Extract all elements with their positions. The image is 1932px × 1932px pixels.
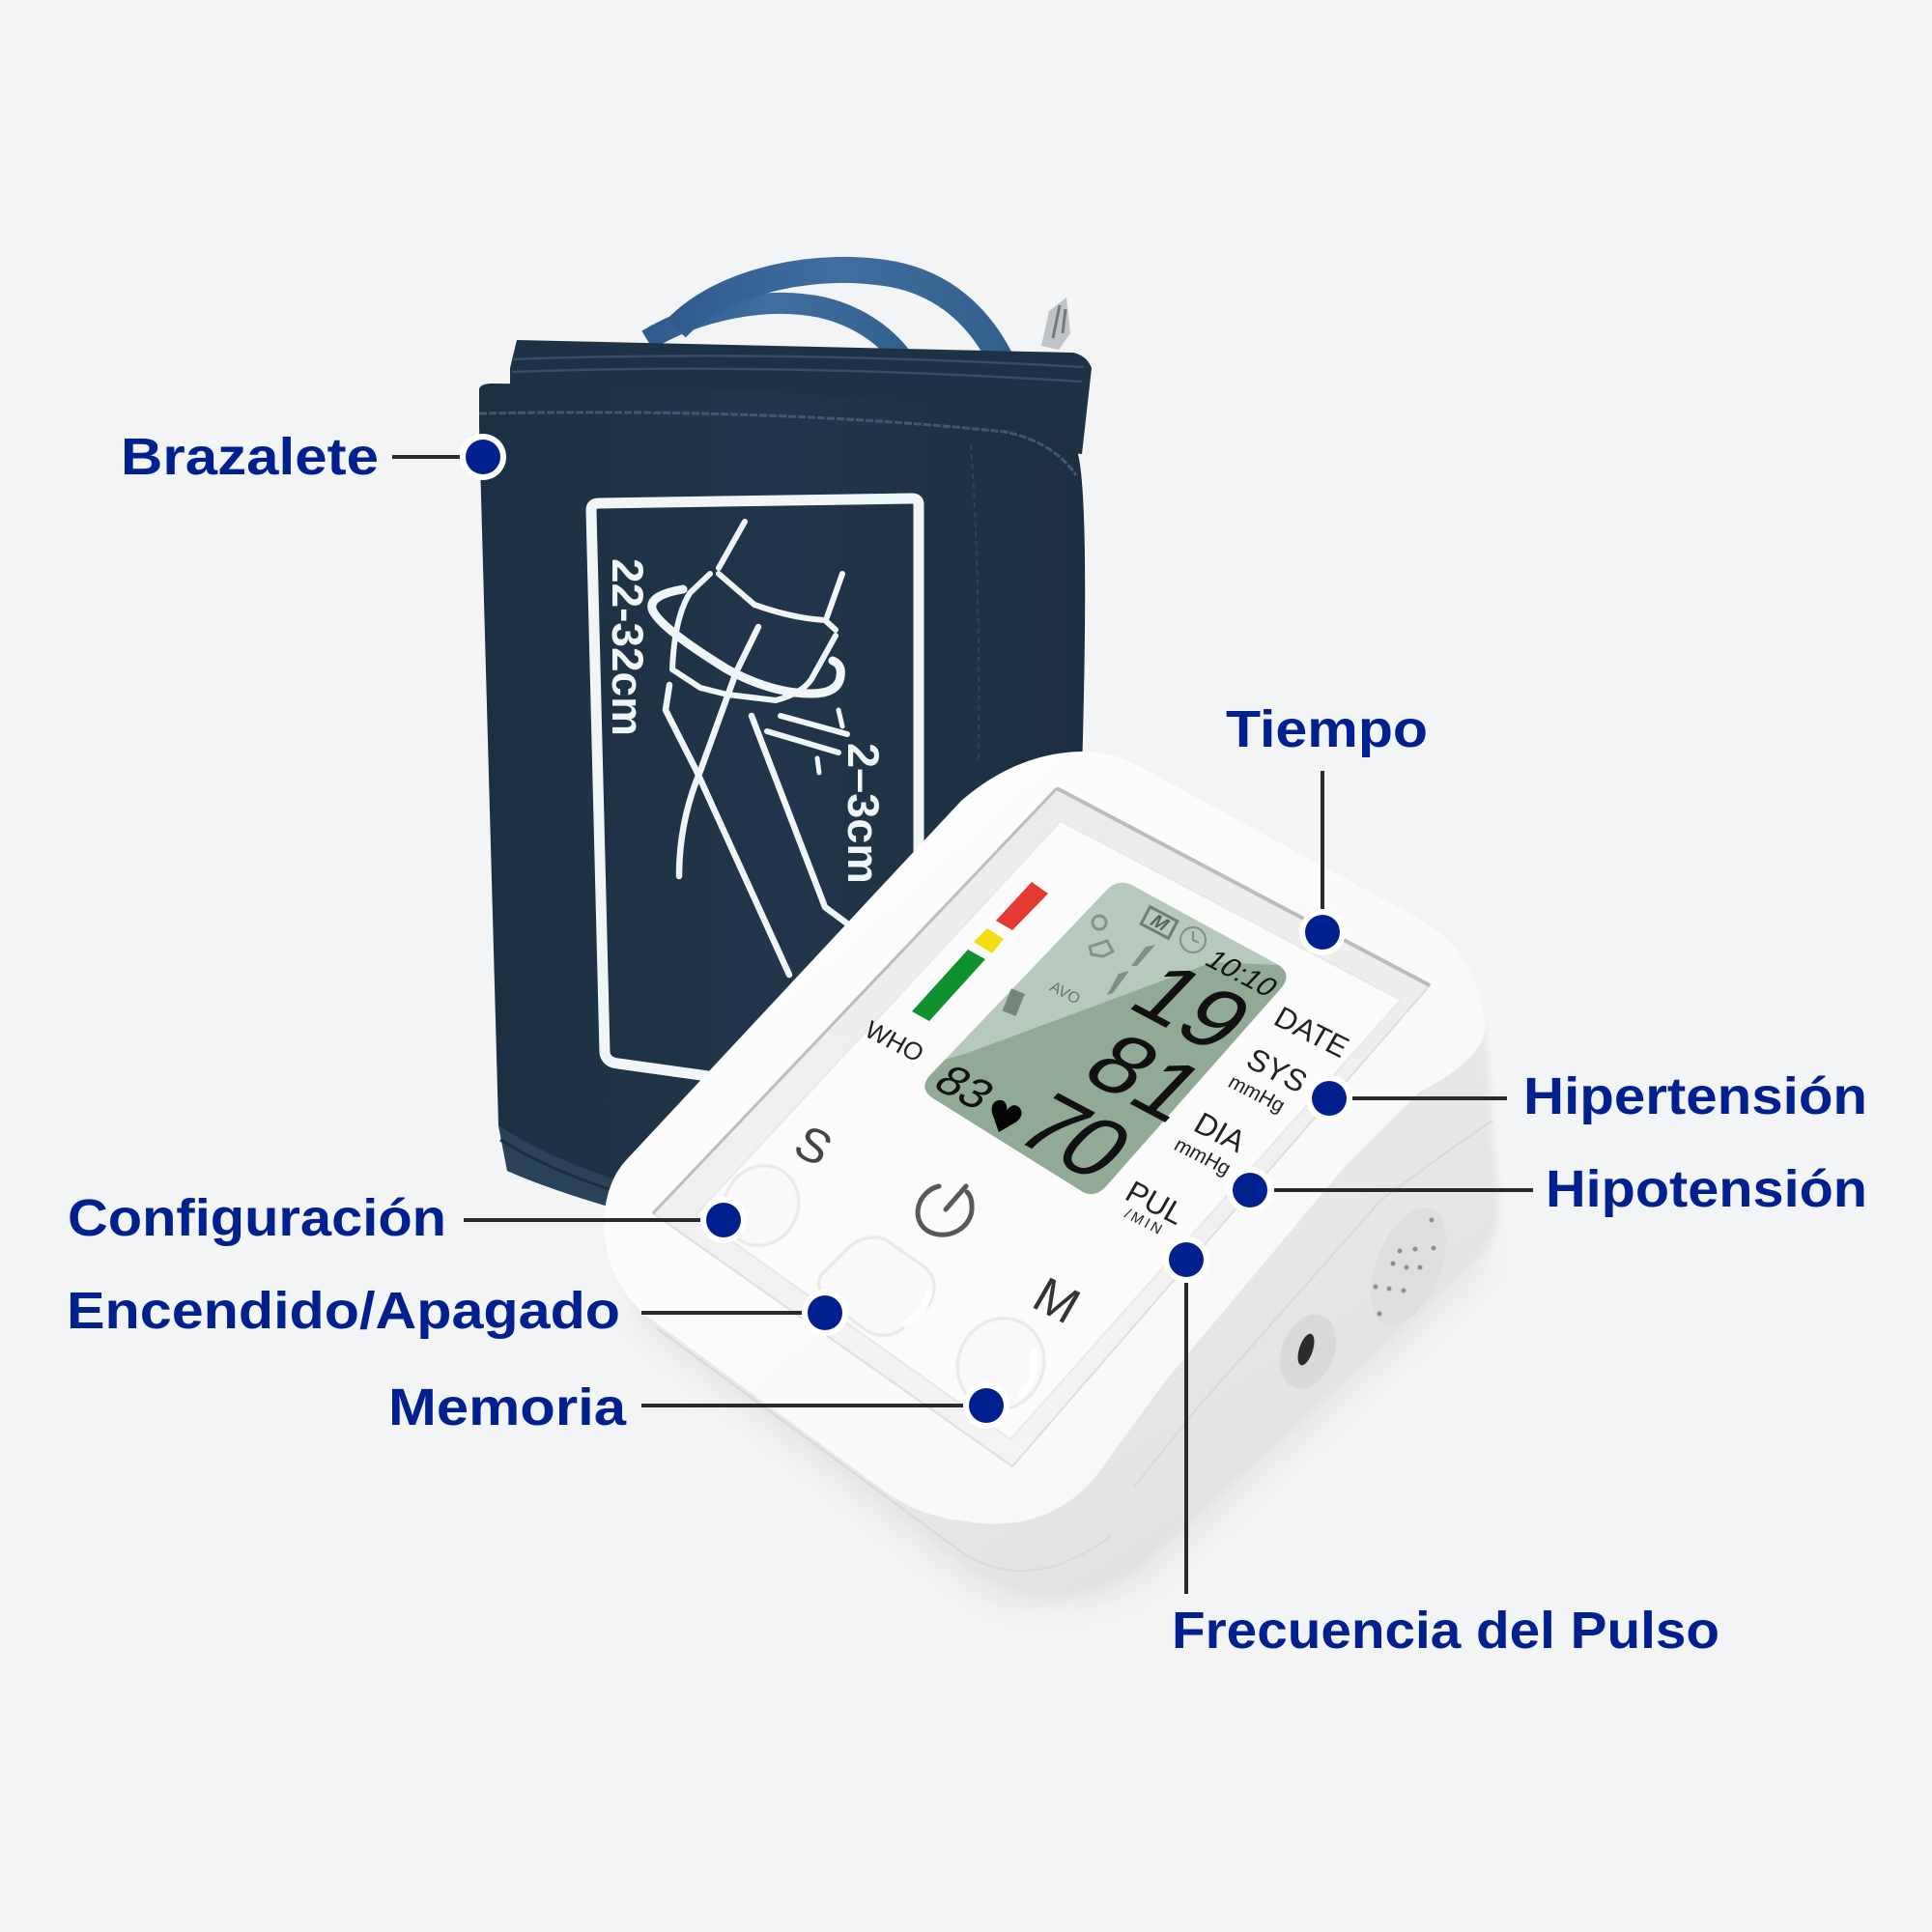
callout: Memoria (388, 1378, 1009, 1436)
power button (819, 1237, 934, 1335)
device labels: SYS (1241, 1041, 1313, 1099)
M button (943, 1304, 1059, 1424)
LCD readings: 19 (1111, 946, 1273, 1068)
cuff text (603, 558, 888, 884)
callout: Configuración (68, 1189, 747, 1247)
callout: Hipotensión (1227, 1160, 1867, 1218)
device labels: /MIN (1122, 1206, 1167, 1239)
callout: Configuración: Configuración (68, 1189, 446, 1247)
key ring (1041, 298, 1070, 350)
LCD screen: 83 (923, 1057, 1005, 1119)
device labels: mmHg (1224, 1071, 1289, 1117)
LCD screen: M (1145, 912, 1174, 935)
device labels (785, 1000, 1354, 1335)
LCD heart: ♥ (978, 1090, 1030, 1149)
callout: Frecuencia del Pulso (1163, 1236, 1719, 1660)
cuff text: 2–3cm (838, 743, 888, 884)
device labels: S (785, 1115, 841, 1177)
device labels: WHO (860, 1015, 929, 1067)
monitor side seams (657, 1121, 1492, 1571)
callout: Brazalete (121, 428, 506, 486)
cuff body (479, 384, 1085, 1208)
device labels: DATE (1268, 1000, 1354, 1065)
blood pressure cuff (479, 270, 1092, 1209)
cuff text: 22-32cm (603, 558, 652, 736)
cuff bottom fold (498, 1125, 618, 1209)
device labels: M (1024, 1267, 1089, 1335)
device labels: PUL (1120, 1174, 1191, 1232)
monitor body (604, 1023, 1498, 1597)
buttons (711, 1153, 1059, 1424)
recessed control panel (653, 788, 1430, 1466)
callout: Hipertensión (1306, 1067, 1867, 1125)
callout: Tiempo (1226, 700, 1428, 955)
cuff back band (510, 340, 1092, 454)
colour scale bars (912, 882, 1048, 1021)
callout: Encendido/Apagado: Encendido/Apagado (67, 1282, 620, 1340)
callout: Brazalete: Brazalete (121, 428, 379, 486)
callout: Frecuencia del Pulso: Frecuencia del Pulso (1172, 1602, 1719, 1660)
callout: Tiempo: Tiempo (1226, 700, 1428, 758)
LCD faint icons: AVO (1047, 979, 1083, 1008)
LCD screen (924, 883, 1287, 1194)
LCD screen: 10:10 (1198, 946, 1284, 1003)
callout: Encendido/Apagado (67, 1282, 848, 1340)
button highlight (903, 1290, 1035, 1396)
device labels: DIA (1188, 1105, 1252, 1159)
LCD screen: 81 (1065, 1016, 1227, 1139)
device labels: mmHg (1170, 1134, 1235, 1179)
air hose (647, 270, 1001, 359)
speaker grille (1355, 1197, 1462, 1336)
LCD screen: 70 (996, 1077, 1151, 1196)
icon: power symbol (918, 1186, 972, 1235)
monitor shadow (628, 1159, 1488, 1606)
LCD faint icons (1003, 907, 1206, 1016)
callout: Memoria: Memoria (388, 1378, 627, 1436)
blood pressure monitor (604, 752, 1498, 1597)
S button (711, 1153, 811, 1258)
monitor top face (604, 752, 1485, 1524)
jack socket (1269, 1306, 1347, 1397)
callout: Hipertensión: Hipertensión (1523, 1067, 1867, 1125)
callout: Hipotensión: Hipotensión (1546, 1160, 1867, 1218)
cuff instruction panel (591, 498, 919, 1084)
